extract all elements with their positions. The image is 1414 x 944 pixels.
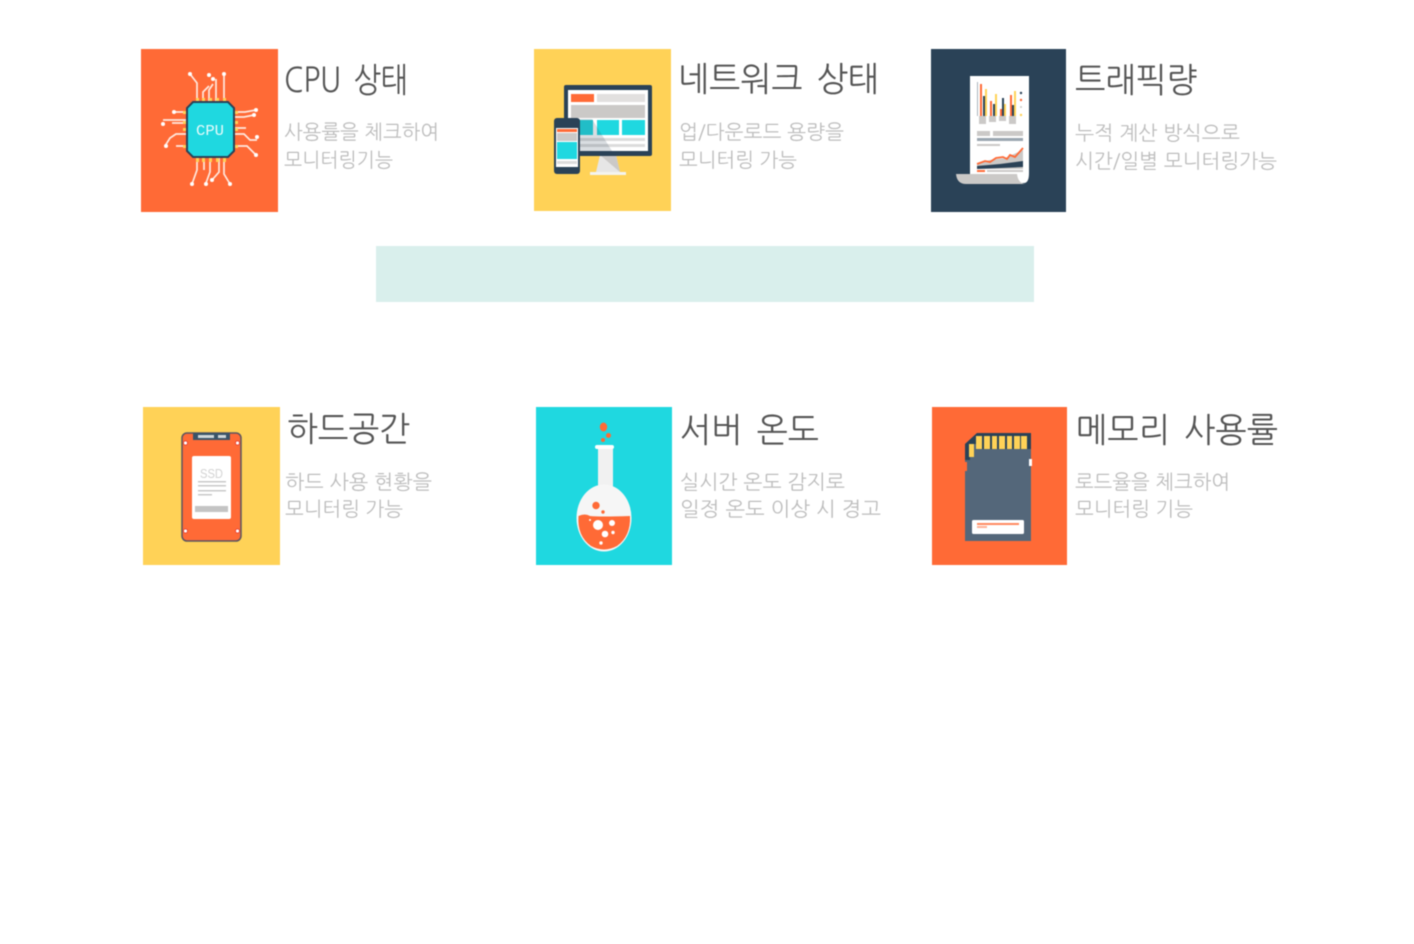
description: CPU status: 사용률을 체크하여 (284, 122, 439, 142)
description: network status: 모니터링 가능 (679, 150, 797, 170)
heading: server temperature: 서버 온도 (680, 413, 819, 447)
description: memory usage: 로드율을 체크하여 (1075, 472, 1230, 492)
description: CPU status: 모니터링기능 (284, 150, 393, 170)
heading: memory usage: 메모리 사용률 (1076, 413, 1278, 447)
icon: SSD drive: SSD (200, 466, 223, 481)
icon: report document (931, 49, 1066, 212)
panel: traffic (931, 49, 1277, 212)
heading: traffic: 트래픽량 (1075, 63, 1197, 97)
description: server temperature (680, 472, 881, 519)
description: memory usage: 모니터링 기능 (1075, 499, 1193, 519)
description: disk space: 하드 사용 현황을 (285, 472, 432, 492)
description: disk space: 모니터링 가능 (285, 499, 403, 519)
icon: CPU chip (141, 49, 278, 212)
description: server temperature: 실시간 온도 감지로 (680, 472, 845, 492)
heading: network status: 네트워크 상태 (678, 62, 879, 96)
description: traffic (1075, 123, 1277, 171)
icon: memory card (932, 407, 1067, 565)
description: memory usage (1075, 472, 1230, 519)
description: traffic: 시간/일별 모니터링가능 (1075, 151, 1277, 171)
icon: monitor and phone (534, 49, 671, 211)
description: disk space (285, 472, 432, 519)
panel: memory usage (932, 407, 1278, 565)
heading: CPU status: CPU 상태 (284, 63, 408, 97)
icon: flask (536, 407, 672, 565)
panel: server temperature (536, 407, 881, 565)
icon: CPU chip: CPU (196, 123, 224, 140)
description: CPU status (284, 122, 439, 170)
heading: disk space: 하드공간 (287, 412, 410, 446)
panel: CPU status (141, 49, 439, 212)
panel: disk space (143, 407, 432, 565)
description: traffic: 누적 계산 방식으로 (1075, 123, 1240, 143)
center band (376, 246, 1034, 302)
description: server temperature: 일정 온도 이상 시 경고 (680, 499, 881, 519)
panel: network status (534, 49, 879, 211)
description: network status (679, 122, 844, 170)
description: network status: 업/다운로드 용량을 (679, 122, 844, 142)
icon: SSD drive (143, 407, 280, 565)
